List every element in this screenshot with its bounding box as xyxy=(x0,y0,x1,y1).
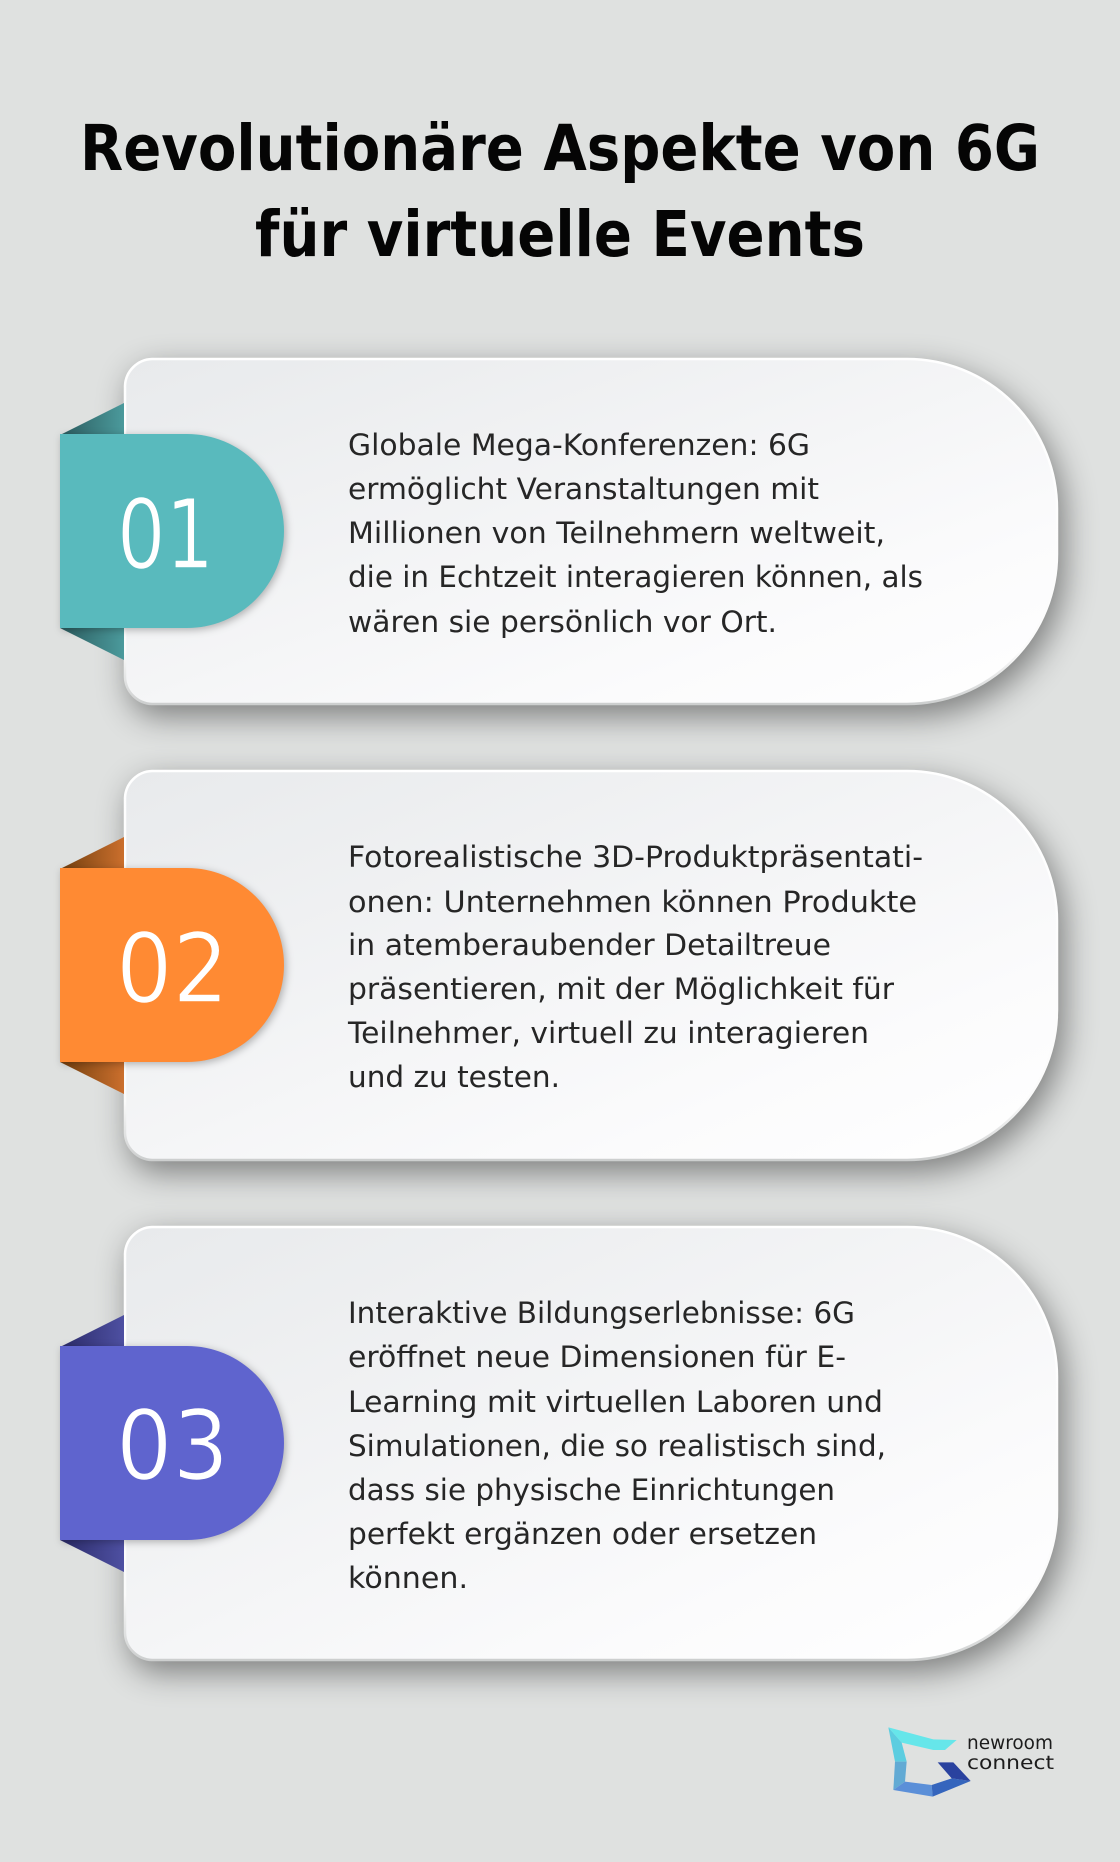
title xyxy=(80,112,1040,271)
card 2 text: Teilnehmer, virtuell zu interagieren xyxy=(347,1016,869,1050)
card 2 text: onen: Unternehmen können Produkte xyxy=(348,885,917,919)
card 3 text: Interaktive Bildungserlebnisse: 6G xyxy=(348,1296,855,1330)
card 3 text xyxy=(348,1296,886,1595)
title: für virtuelle Events xyxy=(255,198,865,271)
logo wordmark: connect xyxy=(967,1753,1054,1774)
icon: logo mark xyxy=(888,1727,971,1797)
panel: card 1 xyxy=(60,359,1057,704)
card 1 text: ermöglicht Veranstaltungen mit xyxy=(348,472,819,506)
card 3 text: dass sie physische Einrichtungen xyxy=(348,1473,835,1507)
card 3 text: Learning mit virtuellen Laboren und xyxy=(348,1385,883,1419)
card 1 text: die in Echtzeit interagieren können, als xyxy=(348,560,923,594)
card 1 text xyxy=(348,428,923,639)
card 2 number: 02 xyxy=(116,913,229,1025)
card 2 text: präsentieren, mit der Möglichkeit für xyxy=(348,972,894,1006)
card 3 text: können. xyxy=(348,1561,468,1595)
logo: newroom connect xyxy=(888,1727,1054,1797)
card 2 text xyxy=(347,840,923,1094)
card 3 text: Simulationen, die so realistisch sind, xyxy=(348,1429,886,1463)
card 1 background xyxy=(125,359,1057,704)
card 1 number: 01 xyxy=(117,479,214,591)
card 2 background xyxy=(125,771,1057,1160)
card 2 text: Fotorealistische 3D-Produktpräsentati- xyxy=(348,840,923,874)
card 3 number tab xyxy=(60,1346,284,1540)
card 3 background xyxy=(125,1227,1057,1660)
card 2 ribbon folds xyxy=(60,837,124,1094)
card 3 number: 03 xyxy=(116,1390,229,1502)
card 1 number tab xyxy=(60,434,284,628)
card 3 text: eröffnet neue Dimensionen für E- xyxy=(348,1340,846,1374)
card 2 number tab xyxy=(60,868,284,1062)
logo wordmark: newroom xyxy=(967,1733,1053,1754)
card 1 text: Millionen von Teilnehmern weltweit, xyxy=(348,516,885,550)
card 3 ribbon folds xyxy=(60,1315,124,1572)
card 1 text: Globale Mega-Konferenzen: 6G xyxy=(348,428,810,462)
card 2 text: in atemberaubender Detailtreue xyxy=(348,928,831,962)
card 3 text: perfekt ergänzen oder ersetzen xyxy=(348,1517,817,1551)
panel: card 3 xyxy=(60,1227,1057,1660)
logo wordmark xyxy=(967,1733,1054,1774)
panel: card 2 xyxy=(60,771,1057,1160)
card 1 text: wären sie persönlich vor Ort. xyxy=(348,605,777,639)
card 2 text: und zu testen. xyxy=(348,1060,560,1094)
card 1 ribbon folds xyxy=(60,403,124,660)
